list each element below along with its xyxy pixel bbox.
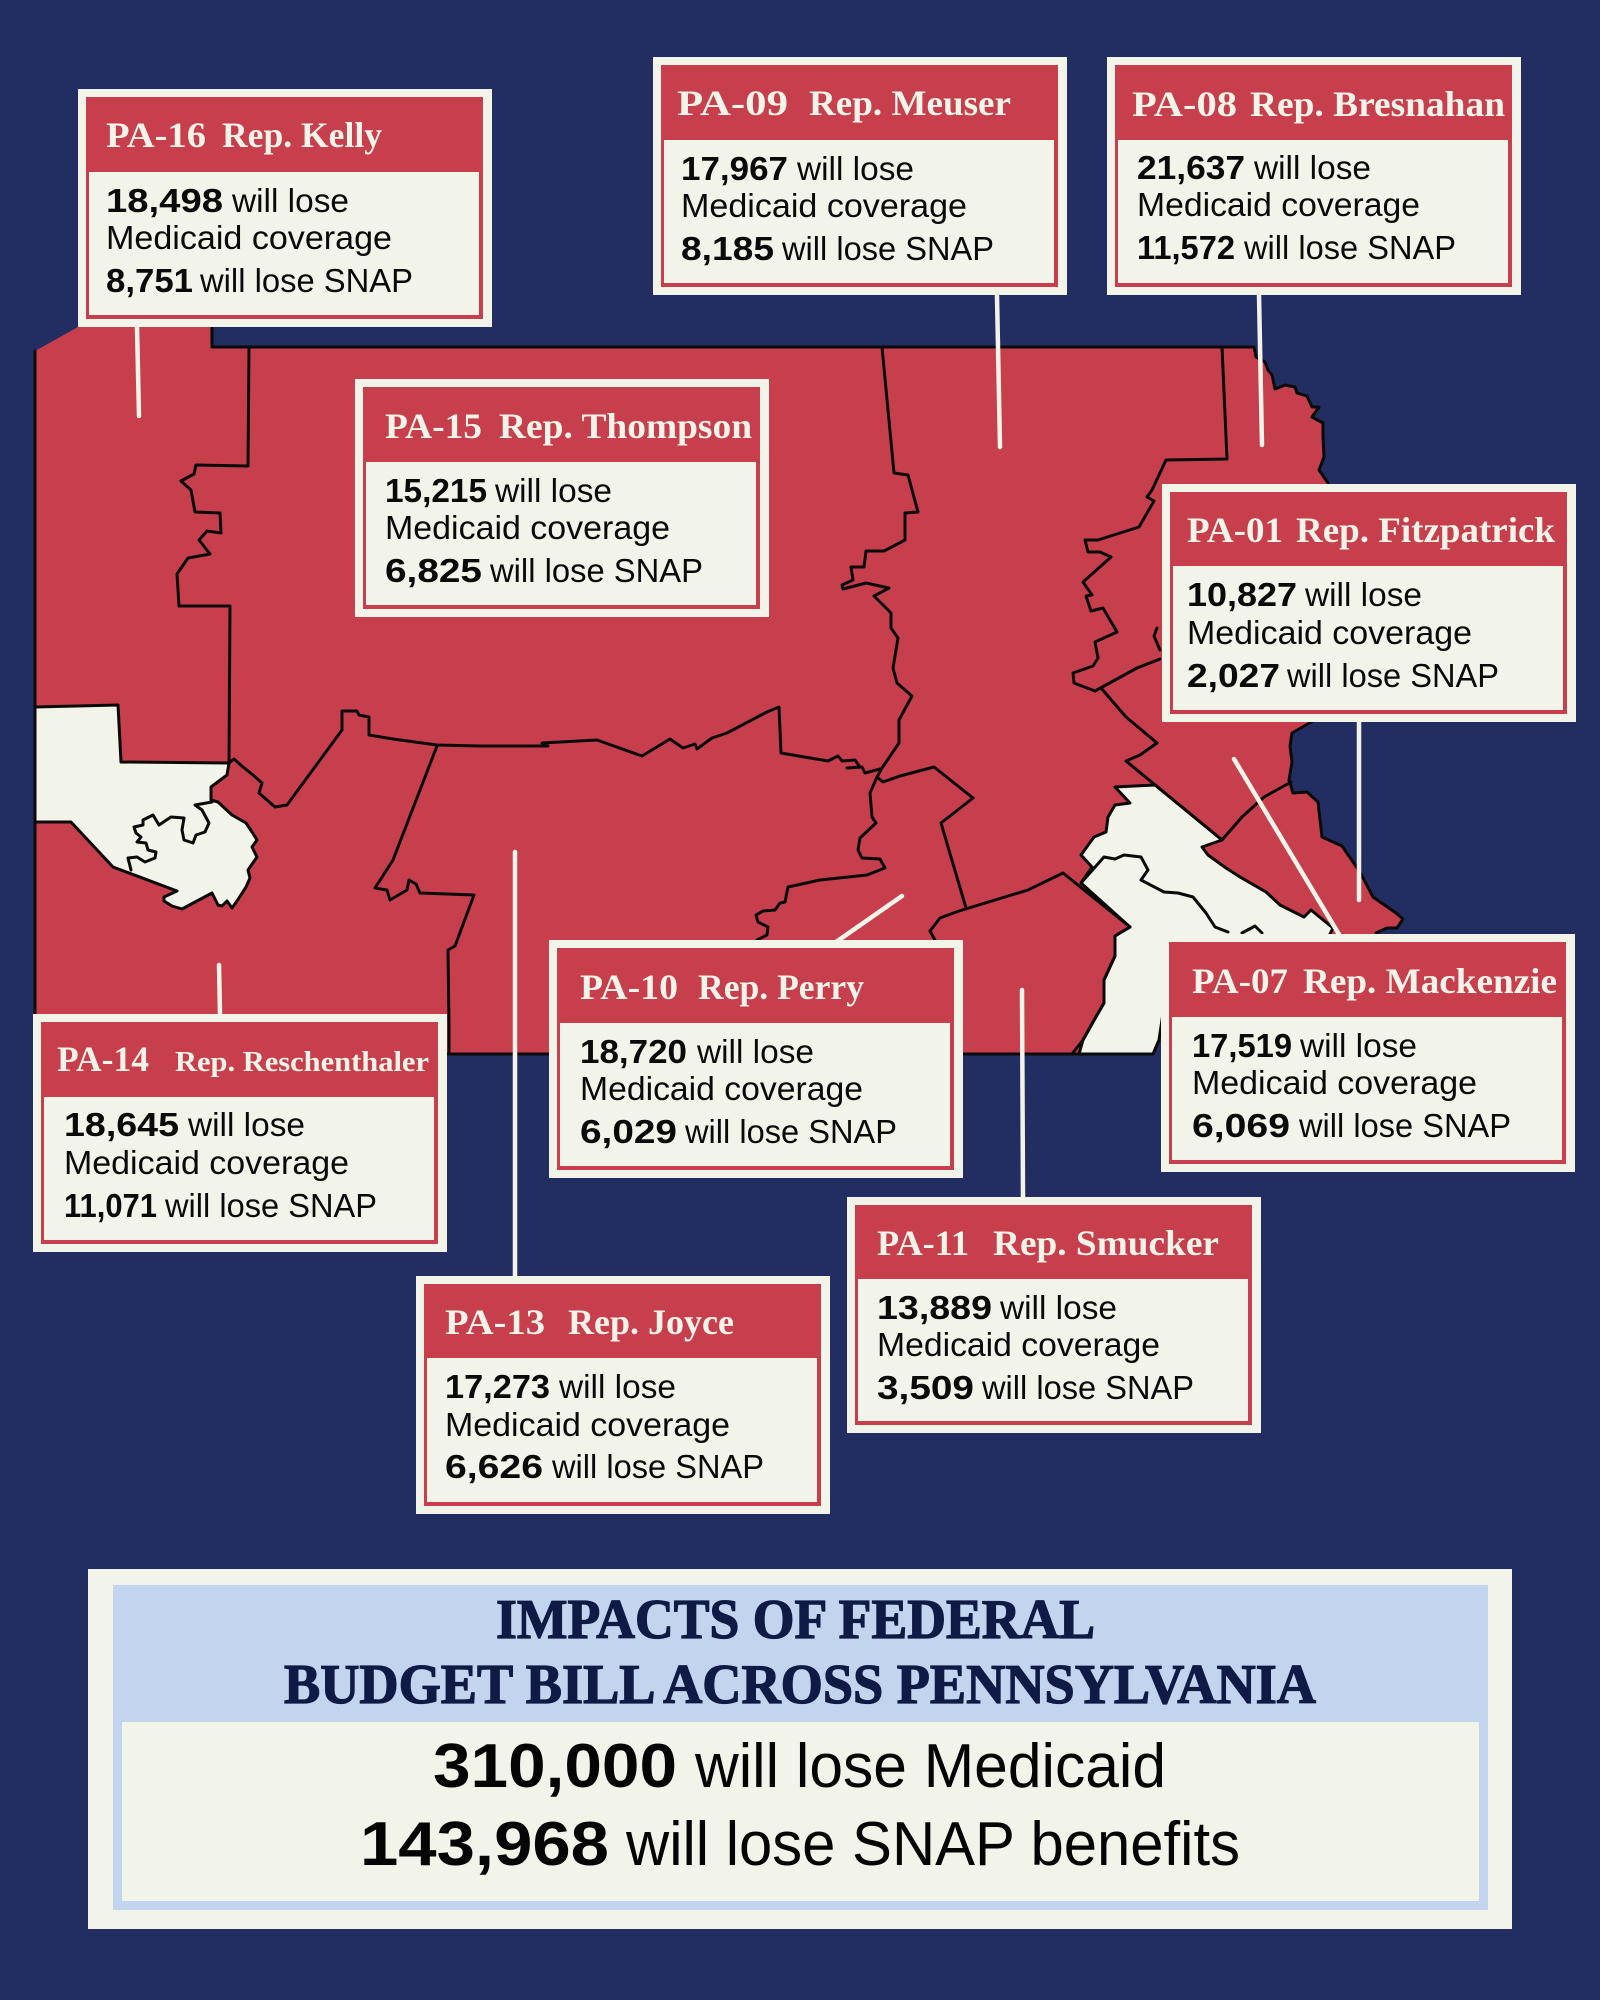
panel: PA-15 Rep. Thompson: 6,825 <box>385 552 482 589</box>
western white district <box>35 705 257 909</box>
panel: PA-07 Rep. Mackenzie: Rep. Mackenzie <box>1303 961 1557 1001</box>
panel: PA-01 Rep. Fitzpatrick <box>1162 484 1576 722</box>
panel: PA-08 Rep. Bresnahan: 11,572 <box>1137 229 1235 266</box>
panel: PA-09 Rep. Meuser: Medicaid coverage <box>681 187 967 224</box>
panel: PA-13 Rep. Joyce: will lose <box>558 1368 676 1405</box>
leader line: PA-01 <box>1357 721 1361 900</box>
panel: PA-01 Rep. Fitzpatrick: 10,827 <box>1187 576 1297 613</box>
panel: PA-13 Rep. Joyce: 17,273 <box>445 1368 550 1405</box>
panel: PA-14 Rep. Reschenthaler <box>33 1014 447 1252</box>
panel: PA-10 Rep. Perry: Medicaid coverage <box>580 1070 863 1107</box>
panel: PA-16 Rep. Kelly: Rep. Kelly <box>222 115 382 155</box>
statewide totals: will lose Medicaid <box>694 1732 1166 1801</box>
panel: PA-01 Rep. Fitzpatrick: will lose SNAP <box>1286 657 1499 694</box>
leader line: PA-07 <box>1234 759 1340 936</box>
panel: PA-10 Rep. Perry: PA-10 <box>580 967 678 1007</box>
panel: PA-07 Rep. Mackenzie: PA-07 <box>1192 961 1288 1001</box>
western inner district line <box>128 802 212 870</box>
panel: PA-01 Rep. Fitzpatrick: PA-01 <box>1187 510 1283 550</box>
panel: PA-15 Rep. Thompson: PA-15 <box>385 406 482 446</box>
title <box>284 1589 1317 1716</box>
panel: PA-08 Rep. Bresnahan <box>1107 57 1521 295</box>
leader line: PA-13 <box>513 852 517 1276</box>
leader line: PA-10 <box>836 896 902 942</box>
leader line: PA-14 <box>219 965 220 1014</box>
panel: PA-16 Rep. Kelly: Medicaid coverage <box>106 219 392 256</box>
panel: PA-16 Rep. Kelly: 18,498 <box>106 182 223 219</box>
panel: PA-01 Rep. Fitzpatrick: will lose <box>1304 576 1422 613</box>
panel: PA-08 Rep. Bresnahan: will lose SNAP <box>1243 229 1456 266</box>
panel: PA-10 Rep. Perry: will lose SNAP <box>684 1113 897 1150</box>
panel: PA-16 Rep. Kelly: PA-16 <box>106 115 206 155</box>
panel: PA-07 Rep. Mackenzie: 6,069 <box>1192 1107 1290 1144</box>
panel: PA-15 Rep. Thompson: Rep. Thompson <box>499 406 752 446</box>
panel: PA-14 Rep. Reschenthaler: 18,645 <box>64 1106 179 1143</box>
panel: PA-07 Rep. Mackenzie: will lose <box>1299 1027 1417 1064</box>
panel: PA-14 Rep. Reschenthaler: 11,071 <box>64 1187 157 1224</box>
statewide totals <box>360 1732 1240 1879</box>
panel: PA-07 Rep. Mackenzie: will lose SNAP <box>1298 1107 1511 1144</box>
panel: PA-08 Rep. Bresnahan: 21,637 <box>1137 149 1245 186</box>
panel: PA-09 Rep. Meuser: 8,185 <box>681 230 774 267</box>
statewide totals: 143,968 <box>360 1810 609 1879</box>
panel: PA-11 Rep. Smucker: will lose <box>999 1289 1117 1326</box>
panel: PA-07 Rep. Mackenzie: 17,519 <box>1192 1027 1292 1064</box>
panel: PA-15 Rep. Thompson <box>355 379 769 617</box>
leader line: PA-11 <box>1022 990 1023 1197</box>
panel: PA-09 Rep. Meuser: PA-09 <box>677 83 788 123</box>
panel: PA-11 Rep. Smucker: 13,889 <box>877 1289 992 1326</box>
panel: PA-01 Rep. Fitzpatrick: Medicaid coverage <box>1187 614 1472 651</box>
panel: PA-13 Rep. Joyce: Rep. Joyce <box>568 1302 734 1342</box>
panel: PA-11 Rep. Smucker: 3,509 <box>877 1369 974 1406</box>
panel: PA-08 Rep. Bresnahan: will lose <box>1253 149 1371 186</box>
panel: PA-09 Rep. Meuser <box>653 57 1067 295</box>
title: BUDGET BILL ACROSS PENNSYLVANIA <box>284 1654 1317 1716</box>
panel: PA-11 Rep. Smucker <box>847 1197 1261 1433</box>
panel: PA-08 Rep. Bresnahan: PA-08 <box>1132 84 1237 124</box>
panel: PA-14 Rep. Reschenthaler: Rep. Reschenthaler <box>175 1046 429 1078</box>
panel: PA-16 Rep. Kelly <box>78 89 492 327</box>
panel: PA-09 Rep. Meuser: will lose SNAP <box>781 230 994 267</box>
panel: PA-13 Rep. Joyce <box>416 1276 830 1514</box>
panel: PA-07 Rep. Mackenzie: Medicaid coverage <box>1192 1064 1477 1101</box>
panel: PA-01 Rep. Fitzpatrick: Rep. Fitzpatrick <box>1296 510 1555 550</box>
panel: PA-11 Rep. Smucker: Medicaid coverage <box>877 1326 1160 1363</box>
southeastern white district <box>1079 785 1333 1054</box>
panel: PA-15 Rep. Thompson: will lose <box>494 472 612 509</box>
panel: PA-08 Rep. Bresnahan: Medicaid coverage <box>1137 186 1420 223</box>
panel: PA-15 Rep. Thompson: will lose SNAP <box>489 552 703 589</box>
panel: PA-11 Rep. Smucker: will lose SNAP <box>981 1369 1194 1406</box>
panel: PA-13 Rep. Joyce: 6,626 <box>445 1448 543 1485</box>
panel: PA-15 Rep. Thompson: 15,215 <box>385 472 487 509</box>
panel: PA-09 Rep. Meuser: Rep. Meuser <box>809 83 1011 123</box>
panel: PA-07 Rep. Mackenzie <box>1161 934 1575 1172</box>
southeastern inner district line <box>1081 855 1262 933</box>
panel: PA-10 Rep. Perry: Rep. Perry <box>698 967 864 1007</box>
statewide totals: 310,000 <box>433 1732 677 1801</box>
panel: PA-10 Rep. Perry <box>549 940 963 1178</box>
panel: PA-13 Rep. Joyce: will lose SNAP <box>551 1448 764 1485</box>
leader line: PA-09 <box>997 296 1000 447</box>
panel: PA-10 Rep. Perry: 18,720 <box>580 1033 687 1070</box>
panel: PA-14 Rep. Reschenthaler: Medicaid coverage <box>64 1144 349 1181</box>
panel: statewide summary <box>88 1569 1512 1929</box>
leader line: PA-16 <box>137 327 139 416</box>
panel: PA-16 Rep. Kelly: will lose SNAP <box>199 262 413 299</box>
panel: PA-08 Rep. Bresnahan: Rep. Bresnahan <box>1250 84 1505 124</box>
panel: PA-15 Rep. Thompson: Medicaid coverage <box>385 509 670 546</box>
title: IMPACTS OF FEDERAL <box>496 1589 1095 1651</box>
panel: PA-13 Rep. Joyce: PA-13 <box>445 1302 545 1342</box>
panel: PA-14 Rep. Reschenthaler: will lose SNAP <box>164 1187 377 1224</box>
panel: PA-16 Rep. Kelly: will lose <box>231 182 349 219</box>
panel: PA-14 Rep. Reschenthaler: will lose <box>187 1106 305 1143</box>
panel: PA-01 Rep. Fitzpatrick: 2,027 <box>1187 657 1280 694</box>
panel: PA-09 Rep. Meuser: 17,967 <box>681 150 788 187</box>
panel: PA-11 Rep. Smucker: Rep. Smucker <box>993 1223 1219 1263</box>
panel: PA-14 Rep. Reschenthaler: PA-14 <box>57 1039 149 1079</box>
panel: PA-10 Rep. Perry: 6,029 <box>580 1113 677 1150</box>
district boundary lines <box>177 347 1291 1054</box>
panel: PA-09 Rep. Meuser: will lose <box>796 150 914 187</box>
map of Pennsylvania congressional districts <box>35 327 1403 1054</box>
leader line: PA-08 <box>1259 295 1262 445</box>
panel: PA-13 Rep. Joyce: Medicaid coverage <box>445 1406 730 1443</box>
panel: PA-16 Rep. Kelly: 8,751 <box>106 262 193 299</box>
statewide totals: will lose SNAP benefits <box>625 1810 1240 1879</box>
panel: PA-10 Rep. Perry: will lose <box>696 1033 814 1070</box>
panel: PA-11 Rep. Smucker: PA-11 <box>877 1223 969 1263</box>
